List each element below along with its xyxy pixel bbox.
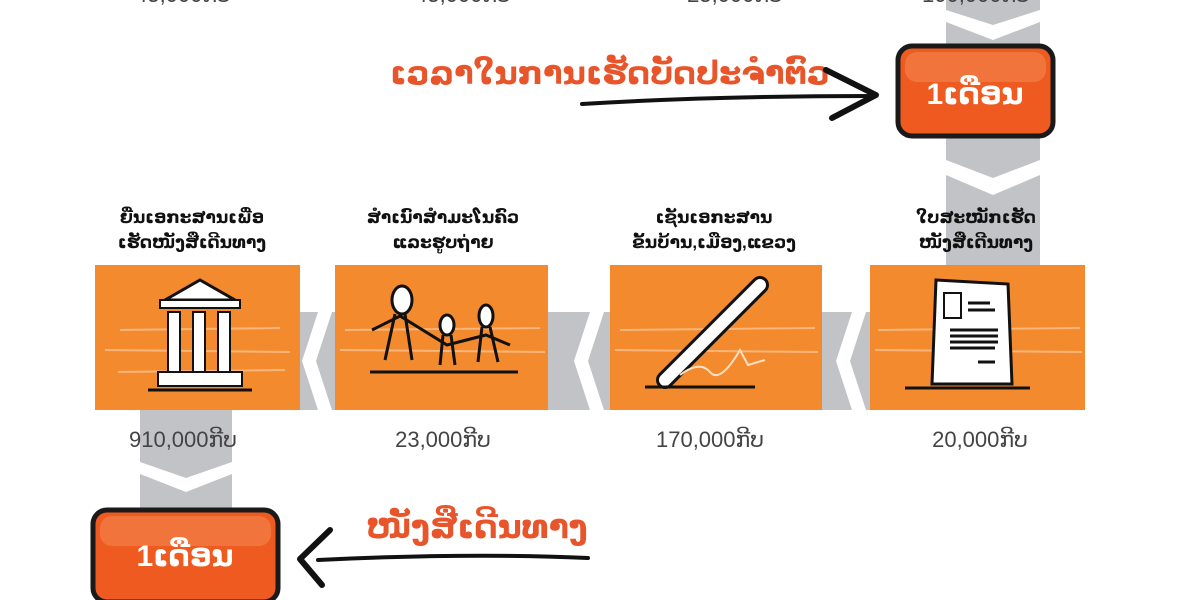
step labels: ໃບສະໝັກເຮັດ <box>916 205 1036 227</box>
arrow: right to box <box>582 70 876 118</box>
arrow: left to box <box>300 530 588 585</box>
step labels: ເຊັນເອກະສານ <box>656 206 772 228</box>
gray flow band: horizontal <box>150 312 1050 410</box>
gray flow band: right vertical <box>946 0 1040 265</box>
prices: 20,000ກີບ <box>932 427 1028 452</box>
top cut-off prices <box>135 0 1030 7</box>
prices: 23,000ກີບ <box>395 427 491 452</box>
box: 1 month bottom: 1ເດືອນ <box>137 537 233 573</box>
panel: building <box>95 265 300 410</box>
step labels: ແລະຮູບຖ່າຍ <box>392 232 494 254</box>
step labels <box>118 205 1036 254</box>
step labels: ຂັ້ນບ້ານ,ເມືອງ,ແຂວງ <box>632 231 796 252</box>
panel: pen <box>610 265 822 410</box>
prices: 910,000ກີບ <box>129 427 237 452</box>
step labels: ສຳເນົາສຳມະໂນຄົວ <box>367 206 519 227</box>
panel: form <box>870 265 1085 410</box>
heading: passport: ໜັງສືເດີນທາງ <box>366 504 588 546</box>
heading: ID card time: ເວລາໃນການເຮັດບັດປະຈຳຕົວ <box>390 53 830 91</box>
step labels: ເຮັດໜັງສືເດີນທາງ <box>118 230 266 252</box>
box: 1 month top <box>898 46 1053 136</box>
panel: family <box>335 265 548 410</box>
box: 1 month bottom <box>93 510 278 600</box>
prices <box>129 427 1028 452</box>
gray flow band: bottom-left vertical <box>140 405 232 515</box>
prices: 170,000ກີບ <box>656 427 764 452</box>
step labels: ໜັງສືເດີນທາງ <box>919 230 1033 252</box>
box: 1 month top: 1ເດືອນ <box>927 75 1023 111</box>
step labels: ຍື່ນເອກະສານເພື່ອ <box>120 206 264 227</box>
